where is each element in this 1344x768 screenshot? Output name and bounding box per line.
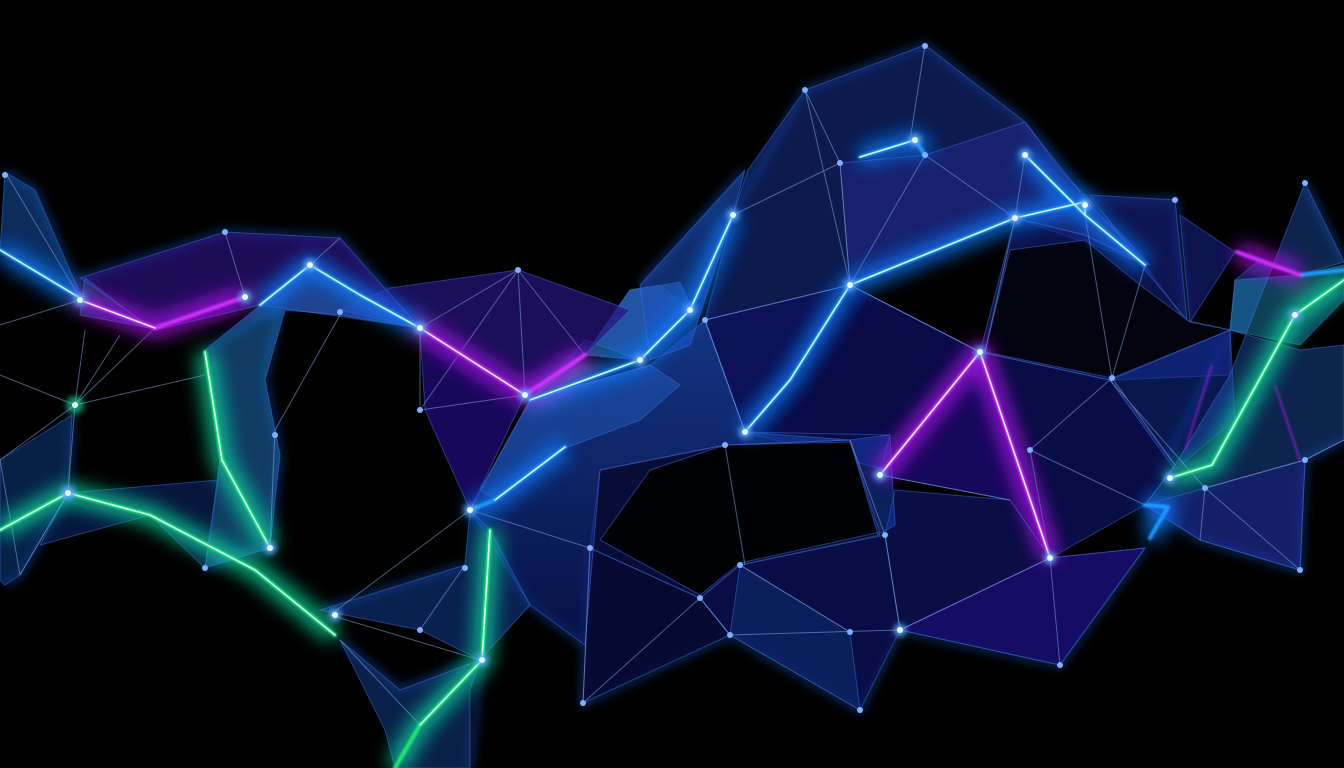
glowing nodes bbox=[61, 134, 1301, 666]
bright cores bbox=[0, 140, 1344, 725]
green glowing lines bbox=[0, 280, 1344, 768]
blue glowing lines bbox=[0, 140, 1344, 538]
faint magenta streaks bbox=[1185, 365, 1300, 460]
magenta glowing lines bbox=[80, 252, 1300, 558]
